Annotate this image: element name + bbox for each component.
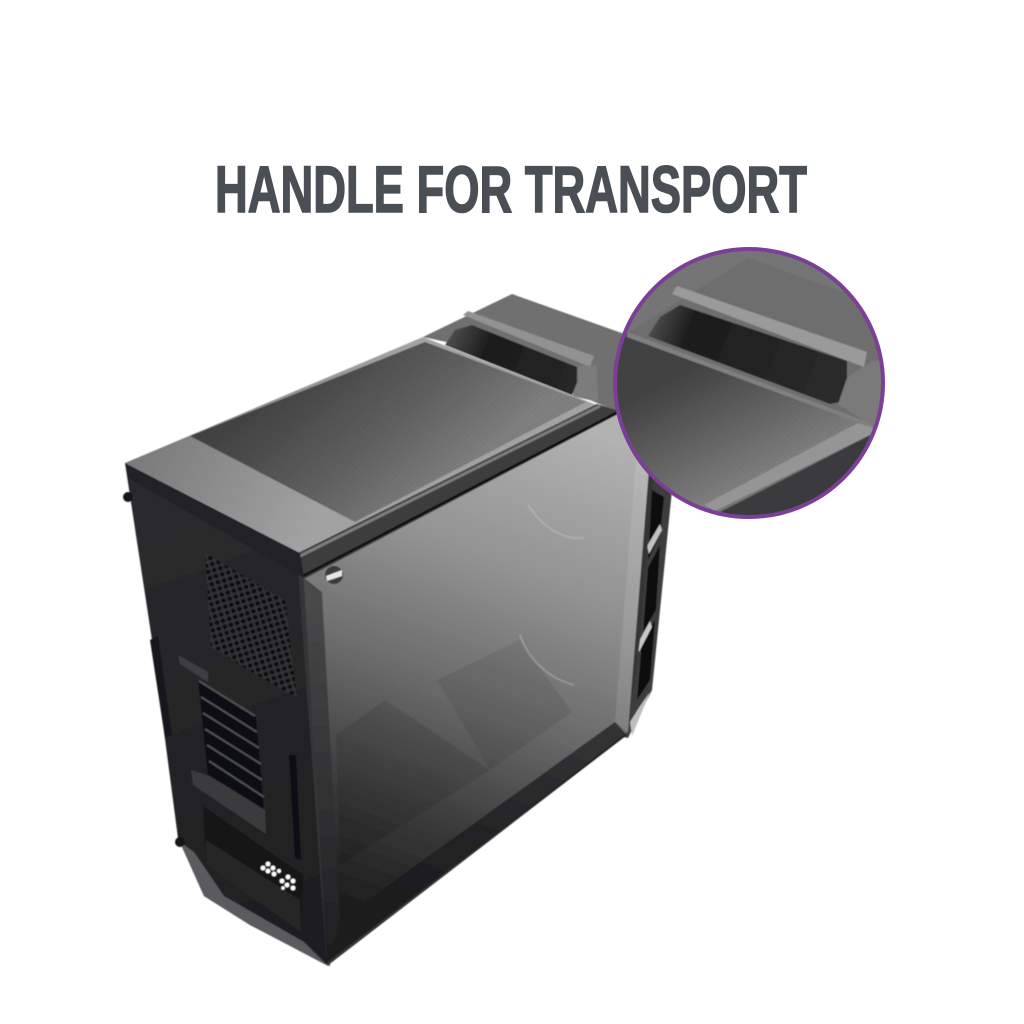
left side edge handle [150,636,172,738]
magnified mesh top lip [627,332,873,428]
lower bracket [191,770,266,834]
vent perforations [289,755,301,860]
bottom foot [180,842,328,966]
glass screw [325,566,343,584]
rear panel [123,463,330,966]
handle back plate [423,294,630,415]
magnified handle callout [613,247,885,519]
handle grip [463,311,594,367]
upper bracket [178,655,208,682]
glass interior reflections [336,505,584,865]
top panel [125,337,622,580]
magnified front rim [704,423,880,511]
handle side post [572,365,598,402]
top handle [423,294,630,415]
glass right frame highlight [615,394,655,732]
tempered glass side panel [298,392,660,966]
purple ring [615,249,883,517]
magnified grip [672,286,867,367]
fan grille [205,553,297,697]
glass dark band on base [330,722,627,960]
magnified right post [838,361,881,426]
magnified mesh [617,333,856,508]
magnified recess [648,305,847,404]
side vents strip [615,470,672,738]
expansion slots [198,680,264,812]
handle recess [445,325,577,395]
mounting holes [261,862,295,890]
psu opening [203,806,303,932]
magnified back plate [600,258,900,440]
front rim [298,404,622,580]
thumb screws [123,492,185,847]
computer case illustration [123,294,672,966]
top mesh [190,342,586,522]
glass left frame [304,578,340,964]
